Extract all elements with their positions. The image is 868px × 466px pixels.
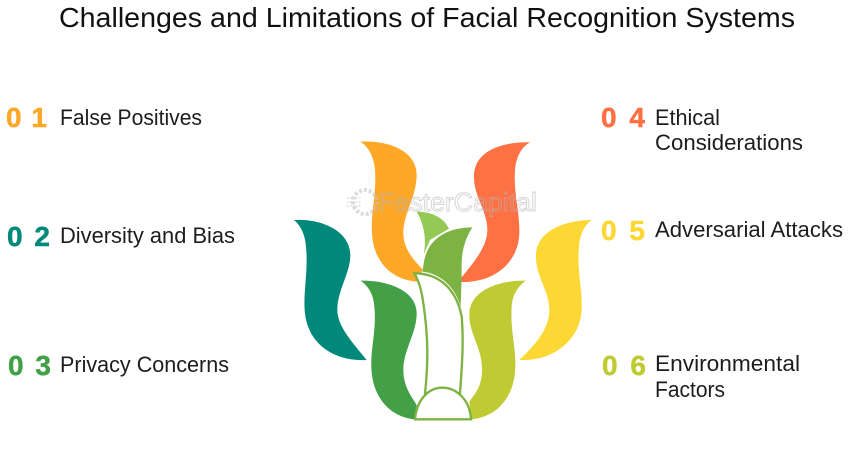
petal: orange [360, 141, 423, 282]
item 06: Environmental Factors [602, 350, 800, 402]
item 03: Privacy Concerns: 0 3 [8, 350, 51, 381]
item 05: Adversarial Attacks: Adversarial Attacks [655, 217, 843, 242]
petal: green [361, 281, 417, 419]
item 04: Ethical Considerations: Ethical [655, 105, 720, 130]
item 01: False Positives: 0 1 [6, 102, 47, 133]
item 03: Privacy Concerns: Privacy Concerns [60, 352, 229, 377]
petal: lime [469, 281, 526, 419]
petal: teal [294, 220, 367, 360]
title: Challenges and Limitations of Facial Recognition Systems [59, 2, 795, 33]
item 05: Adversarial Attacks: 0 5 [601, 215, 645, 246]
item 03: Privacy Concerns [8, 350, 229, 381]
watermark: FasterCapital: FasterCapital [378, 187, 537, 217]
item 06: Environmental Factors: 0 6 [602, 350, 646, 381]
item 04: Ethical Considerations: 0 4 [601, 102, 645, 133]
petal: yellow [519, 220, 592, 360]
central plant graphic [294, 141, 592, 419]
item 04: Ethical Considerations: Considerations [655, 130, 803, 155]
item 02: Diversity and Bias: 0 2 [7, 221, 50, 252]
stalk outline [414, 273, 463, 393]
item 02: Diversity and Bias: Diversity and Bias [60, 223, 235, 248]
petal: coral [459, 142, 530, 282]
item 06: Environmental Factors: Factors [655, 377, 725, 402]
item 02: Diversity and Bias [7, 221, 235, 252]
dome base [415, 388, 471, 419]
item 05: Adversarial Attacks [601, 215, 843, 246]
item 01: False Positives: False Positives [60, 105, 202, 130]
item 04: Ethical Considerations [601, 102, 803, 155]
leaf: light green [417, 212, 449, 254]
leaf: mid green [422, 227, 472, 307]
item 01: False Positives [6, 102, 202, 133]
item 06: Environmental Factors: Environmental [655, 351, 800, 376]
